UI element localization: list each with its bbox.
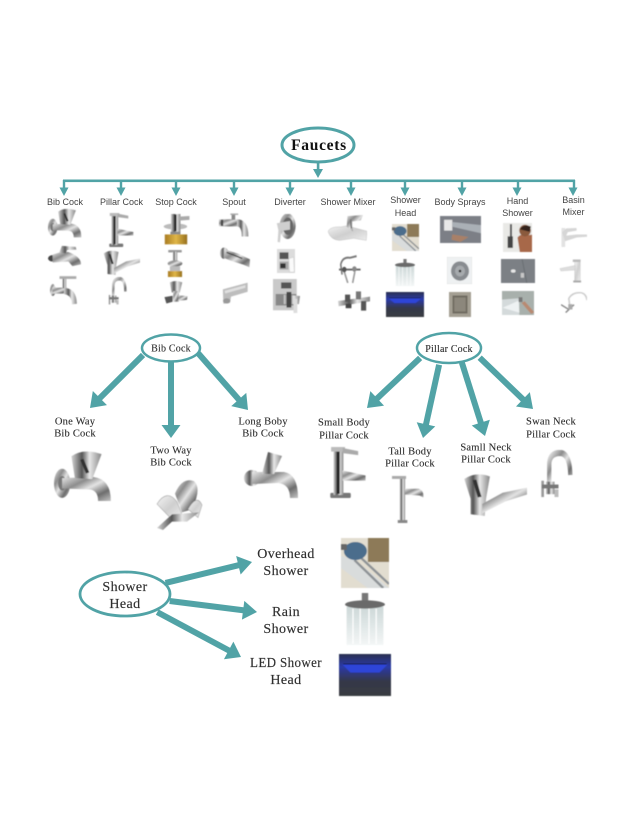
icon: stop cock 2 bbox=[168, 250, 182, 277]
icon: long body bib cock bbox=[244, 452, 298, 498]
category labels: Diverter bbox=[274, 197, 306, 207]
icon: two way bib cock bbox=[157, 480, 202, 530]
title node: Faucets bbox=[282, 128, 354, 162]
node: Pillar Cock: Pillar Cock bbox=[425, 344, 473, 355]
icon: spout 3 bbox=[223, 283, 247, 304]
category labels: Stop Cock bbox=[155, 197, 197, 207]
photo: hand shower 2 bbox=[501, 259, 535, 283]
category labels: Spout bbox=[222, 197, 246, 207]
icon: pillar cock 3 bbox=[109, 279, 125, 304]
arrows from Pillar Cock bbox=[360, 350, 540, 440]
icon: shower mixer 3 bbox=[338, 291, 370, 311]
node: Shower Head: Shower bbox=[102, 580, 148, 595]
icon: swan neck pillar cock bbox=[541, 453, 570, 497]
icon: spout 2 bbox=[220, 247, 250, 267]
Bib Cock type labels: One Way bbox=[55, 416, 96, 428]
photo: LED shower head bbox=[339, 654, 391, 696]
Bib Cock type labels: Bib Cock bbox=[150, 458, 192, 468]
Shower Head type labels: Rain bbox=[272, 605, 300, 620]
photo: hand shower 3 bbox=[502, 291, 534, 315]
category labels: Pillar Cock bbox=[100, 197, 144, 207]
Shower Head type photos bbox=[339, 538, 391, 696]
Pillar Cock type labels: Swan Neck bbox=[526, 416, 577, 428]
category labels: Mixer bbox=[562, 207, 585, 217]
Shower Head type labels: Overhead bbox=[257, 547, 315, 562]
icon: tall body pillar cock bbox=[392, 476, 423, 523]
icon: basin mixer 1 bbox=[562, 228, 587, 247]
Bib Cock type labels: Long Boby bbox=[238, 416, 288, 428]
icon: small neck pillar cock bbox=[464, 474, 527, 516]
Bib Cock type labels: Bib Cock bbox=[242, 428, 284, 440]
Pillar Cock type labels: Pillar Cock bbox=[461, 454, 511, 466]
Shower Head type labels bbox=[250, 547, 322, 688]
tree rail with category arrows bbox=[60, 180, 578, 196]
product thumbnails grid bbox=[48, 209, 587, 317]
node: Shower Head bbox=[80, 572, 170, 616]
photo: overhead shower bbox=[341, 538, 389, 588]
icon: diverter 2 bbox=[277, 249, 295, 273]
icon: basin mixer 3 bbox=[561, 293, 587, 313]
category labels: Bib Cock bbox=[47, 197, 84, 207]
icon: bib cock 3 bbox=[50, 276, 77, 304]
icon: bib cock 1 bbox=[48, 209, 81, 237]
Bib Cock type labels: Bib Cock bbox=[54, 428, 96, 440]
icon: bib cock 2 bbox=[48, 246, 81, 266]
arrows from Bib Cock bbox=[83, 346, 256, 438]
node: Bib Cock bbox=[142, 334, 200, 362]
category labels: Basin bbox=[562, 195, 585, 205]
icon: pillar cock 2 bbox=[104, 251, 140, 275]
icon: shower mixer 2 bbox=[339, 256, 361, 283]
icon: shower mixer 1 bbox=[328, 215, 367, 240]
Pillar Cock type images bbox=[330, 447, 570, 523]
category labels: Hand bbox=[507, 196, 528, 206]
category labels: Shower bbox=[502, 208, 533, 218]
icon: diverter 3 bbox=[273, 279, 300, 313]
Shower Head type labels: Shower bbox=[263, 564, 309, 579]
category labels: Shower bbox=[390, 195, 421, 205]
icon: basin mixer 2 bbox=[560, 260, 581, 282]
arrows from Shower Head bbox=[153, 553, 258, 666]
photo: shower head 3 bbox=[386, 292, 424, 317]
photo: rain shower bbox=[345, 593, 385, 645]
icon: stop cock 1 bbox=[164, 214, 189, 244]
Pillar Cock type labels: Samll Neck bbox=[460, 442, 512, 454]
arrow: Faucets to category rail bbox=[313, 162, 323, 178]
category labels: Head bbox=[395, 208, 416, 218]
icon: small body pillar cock bbox=[330, 447, 366, 498]
Bib Cock type labels bbox=[54, 416, 288, 468]
photo: shower head 1 bbox=[392, 224, 419, 251]
Pillar Cock type labels: Pillar Cock bbox=[319, 430, 369, 442]
Pillar Cock type labels: Small Body bbox=[318, 418, 370, 428]
photo: hand shower 1 bbox=[503, 223, 532, 252]
icon: diverter 1 bbox=[277, 213, 296, 242]
icon: spout 1 bbox=[219, 213, 248, 237]
Pillar Cock type labels: Pillar Cock bbox=[526, 430, 576, 440]
Bib Cock type images bbox=[54, 451, 298, 530]
Pillar Cock type labels: Pillar Cock bbox=[385, 458, 435, 470]
photo: body spray 1 bbox=[440, 216, 481, 243]
category labels: Shower Mixer bbox=[320, 197, 376, 207]
category labels bbox=[47, 195, 585, 218]
photo: body spray 2 bbox=[447, 257, 472, 284]
Shower Head type labels: LED Shower bbox=[250, 656, 322, 671]
node: Bib Cock: Bib Cock bbox=[151, 344, 191, 354]
title node: Faucets: Faucets bbox=[291, 137, 347, 154]
Pillar Cock type labels: Tall Body bbox=[388, 446, 432, 458]
photo: shower head 2 bbox=[395, 259, 415, 286]
icon: pillar cock 1 bbox=[109, 213, 133, 247]
icon: one way bib cock bbox=[54, 451, 111, 501]
category labels: Body Sprays bbox=[434, 197, 486, 207]
Shower Head type labels: Shower bbox=[263, 622, 309, 637]
node: Shower Head: Head bbox=[109, 597, 141, 612]
Bib Cock type labels: Two Way bbox=[150, 446, 192, 456]
Shower Head type labels: Head bbox=[270, 673, 302, 688]
node: Pillar Cock bbox=[417, 333, 481, 363]
photo: body spray 3 bbox=[449, 292, 471, 317]
icon: stop cock 3 bbox=[164, 281, 188, 304]
Pillar Cock type labels bbox=[318, 416, 577, 470]
